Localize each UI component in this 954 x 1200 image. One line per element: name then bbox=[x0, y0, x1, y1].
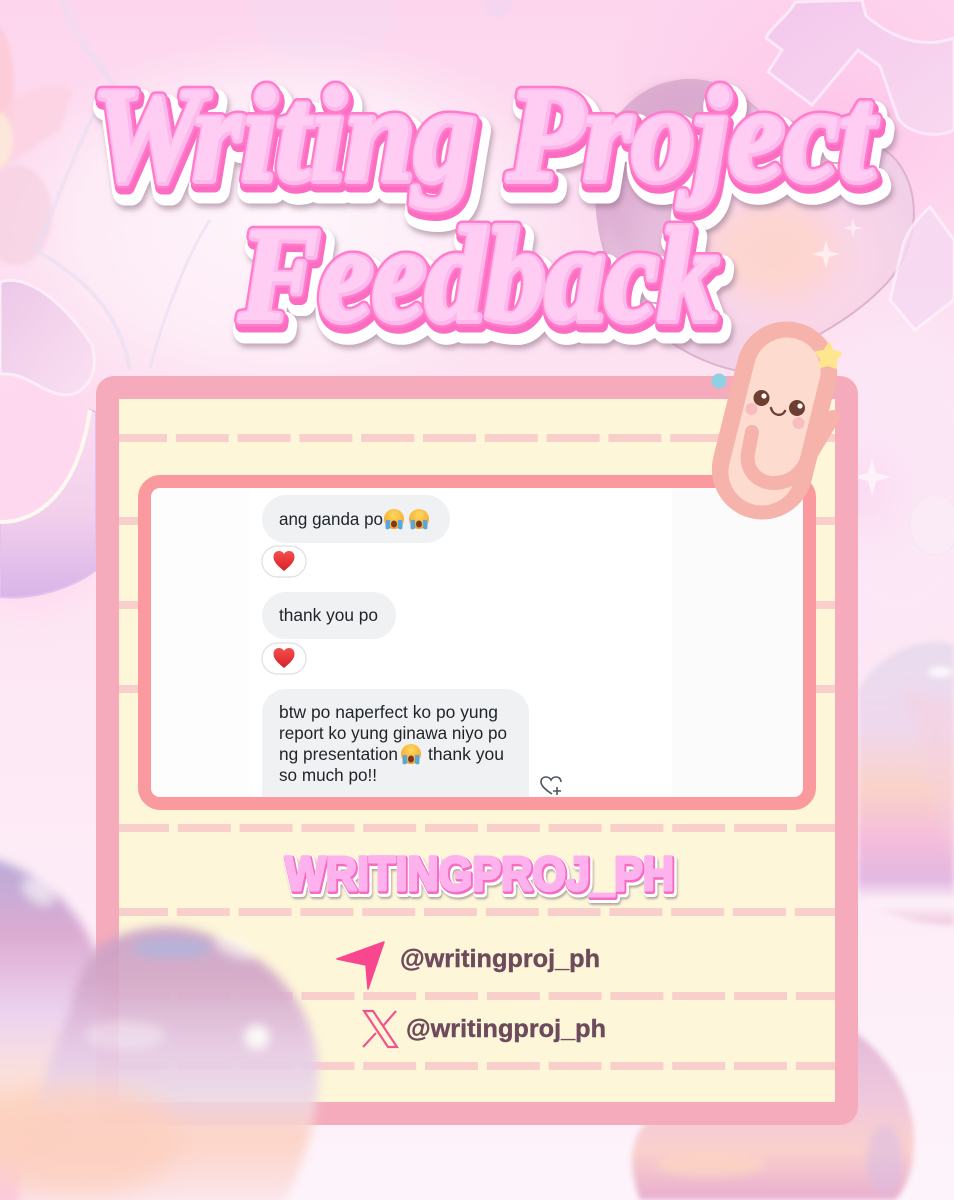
peach glow bbox=[0, 1085, 180, 1195]
screenshot frame bbox=[144, 482, 810, 804]
mascot: paperclip bbox=[701, 311, 848, 530]
bubble right bbox=[858, 642, 954, 925]
brand name: WRITINGPROJ_PH bbox=[285, 848, 674, 901]
title line 1: Writing Project bbox=[91, 60, 876, 208]
bubble bottom left bbox=[0, 858, 318, 1200]
decoration: heart bubble bbox=[596, 80, 914, 372]
face bbox=[746, 390, 805, 429]
chat bubble: thank you po: thank you po bbox=[279, 605, 378, 625]
decoration: glossy blob upper left bbox=[0, 280, 94, 395]
icon: X logo bbox=[363, 1011, 397, 1047]
decoration: pink flower left bbox=[0, 24, 72, 265]
decoration: ribbon top right bbox=[766, 0, 954, 134]
decoration: pale bubble top bbox=[253, 0, 513, 62]
chat bubble: long message: thank you bbox=[428, 744, 504, 764]
chat bubble: long message: report ko yung ginawa niyo po bbox=[279, 723, 507, 743]
handle: X: @writingproj_ph bbox=[406, 1015, 606, 1043]
brand name: WRITINGPROJ_PH bbox=[286, 850, 675, 902]
chat bubble: thank you po bbox=[262, 592, 396, 639]
title line 2: Feedback bbox=[244, 211, 723, 359]
chat bubble: long message: so much po!! bbox=[279, 765, 377, 785]
title line 1: Writing Project bbox=[97, 71, 882, 219]
title line 2: Feedback bbox=[239, 201, 718, 349]
title line 2: Feedback bbox=[238, 200, 717, 348]
icon: send arrow bbox=[337, 942, 384, 989]
chat bubble: long message: btw po naperfect ko po yung bbox=[279, 702, 498, 722]
bubble bottom right bbox=[632, 1000, 914, 1200]
title bbox=[91, 60, 882, 359]
bubble centre bbox=[20, 927, 318, 1200]
title line 2: Feedback bbox=[241, 206, 720, 354]
card panel bbox=[96, 376, 858, 1125]
decoration: sparkle right bbox=[853, 458, 891, 496]
title line 2: Feedback bbox=[239, 201, 718, 349]
icon: add reaction bbox=[541, 777, 561, 795]
chat bubble: long message: ng presentation bbox=[279, 744, 398, 764]
chat bubble: long message bbox=[262, 689, 529, 797]
dashed ruled lines bbox=[114, 438, 835, 1066]
title line 1: Writing Project bbox=[94, 66, 879, 214]
decoration: glossy blob lower left bbox=[0, 410, 96, 598]
bubble left bbox=[0, 858, 100, 1200]
brand name: WRITINGPROJ_PH bbox=[287, 851, 676, 904]
reaction: heart 2 bbox=[262, 643, 306, 674]
handle: telegram: @writingproj_ph bbox=[400, 945, 600, 973]
title line 1: Writing Project bbox=[92, 61, 877, 209]
star bbox=[816, 343, 841, 368]
chat messages bbox=[262, 495, 561, 819]
decoration: ribbon right bbox=[890, 207, 954, 555]
reaction: heart 1 bbox=[262, 546, 306, 577]
decoration: translucent swoosh bbox=[35, 0, 210, 370]
chat bubble: ang ganda po: ang ganda po bbox=[279, 509, 383, 529]
clip body bbox=[701, 311, 848, 530]
chat bubble: ang ganda po bbox=[262, 495, 450, 543]
blue dot bbox=[712, 374, 726, 388]
title line 1: Writing Project bbox=[92, 61, 877, 209]
